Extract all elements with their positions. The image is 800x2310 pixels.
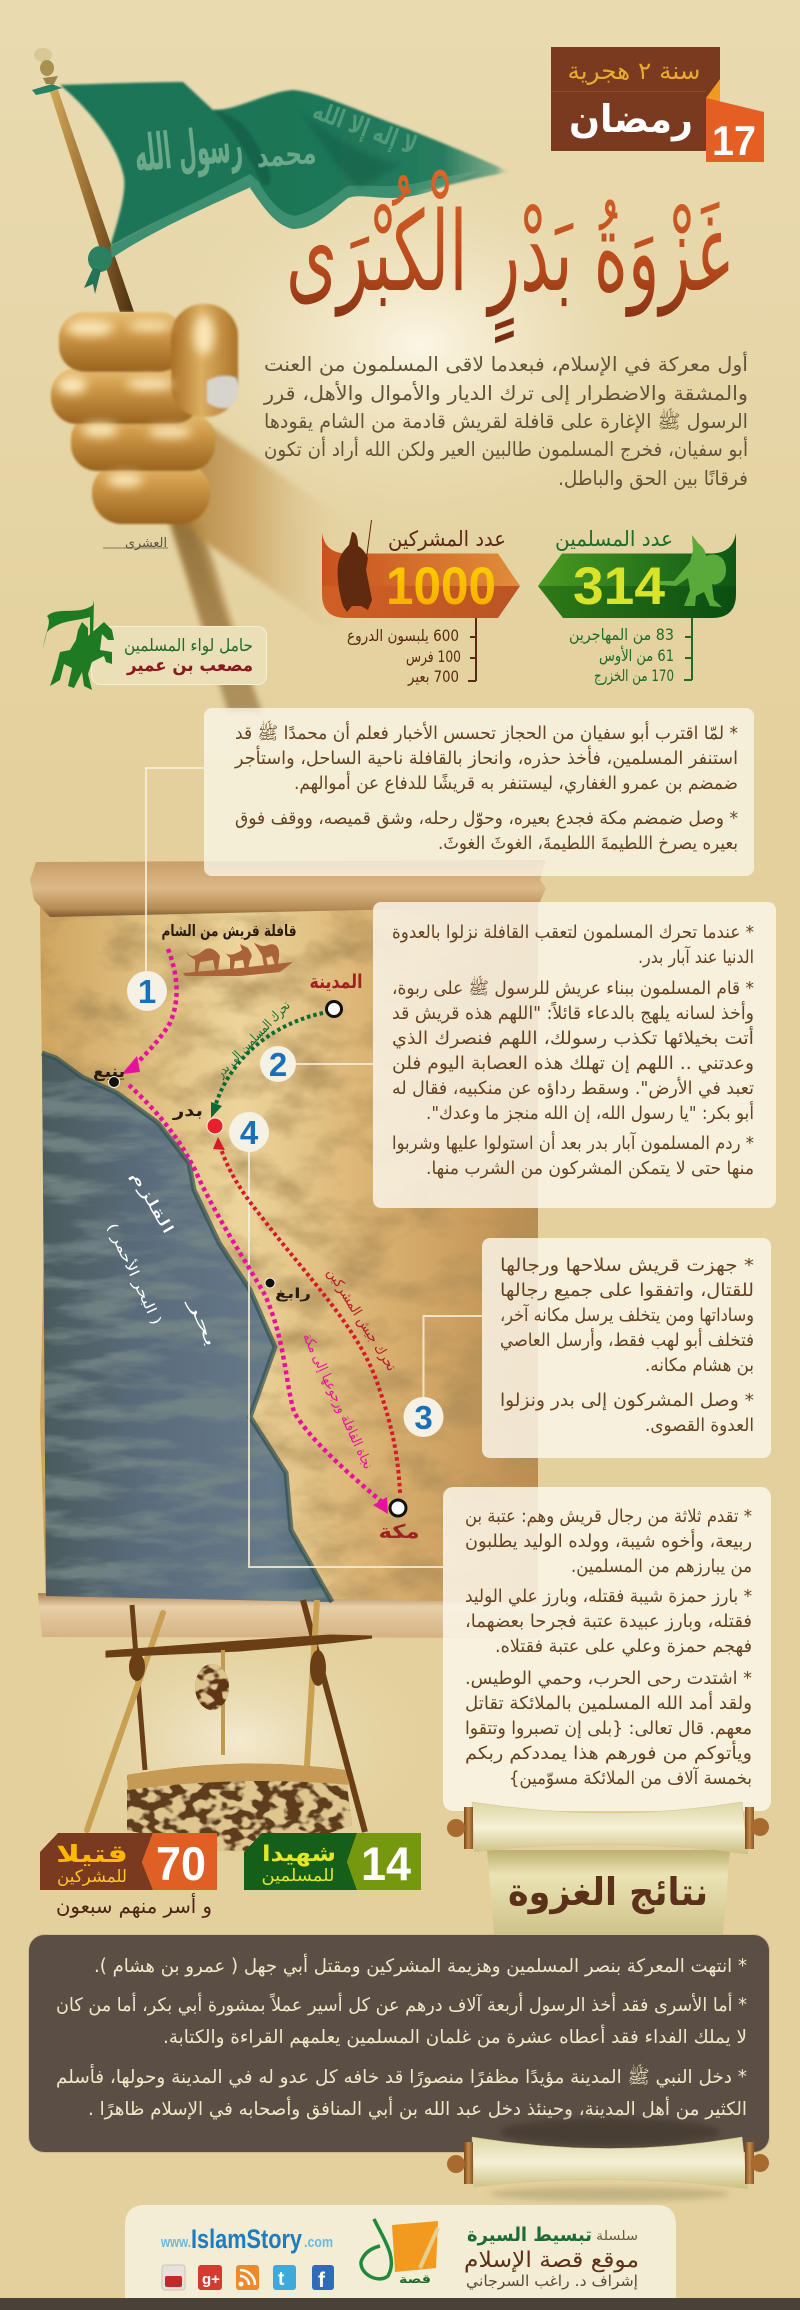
route: caravan escape to Makkah xyxy=(129,1085,388,1514)
result badge: Muslim martyrs: 14 xyxy=(361,1837,411,1890)
result badge: polytheists killed: 70 xyxy=(156,1837,206,1890)
panel: text box 3: * جهزت قريش سلاحها ورجالها xyxy=(500,1255,754,1276)
panel: text box 3: العدوة القصوى. xyxy=(645,1415,754,1436)
icon: youtube xyxy=(162,2265,185,2290)
logo: قصة xyxy=(399,2272,431,2286)
panel: text box 1: ضمضم بن عمرو الغفاري، ليستنفر به قريشًا للدفاع عن أموالهم. xyxy=(294,771,738,794)
panel: text box 3: فتخلف أبو لهب فقط، وأرسل العاصي xyxy=(500,1328,754,1351)
social icons xyxy=(162,2265,334,2292)
point: Rabigh xyxy=(265,1278,275,1288)
website address: www. xyxy=(160,2234,191,2251)
illustration: well xyxy=(87,1600,372,1851)
route label: army: تحرك جيش المشركين xyxy=(323,1266,400,1374)
route: Muslims to Badr xyxy=(211,1013,323,1118)
icon: twitter xyxy=(273,2265,296,2290)
route: polytheist army to Badr xyxy=(213,1137,400,1493)
lower pole over arm xyxy=(165,498,262,712)
route: Quraysh caravan to Yanbu xyxy=(122,949,177,1074)
flag pole xyxy=(34,48,262,712)
sea label: بحر xyxy=(184,1294,221,1350)
intro paragraph: الرسول ﷺ الإغارة على قافلة لقريش قادمة من الشام يقودها xyxy=(264,407,748,433)
panel: text box 4: ويأتوكم من فورهم هذا يمددكم ربكم xyxy=(465,1740,752,1764)
panel: text box 4: * اشتدت رحى الحرب، وحمي الوطيس. xyxy=(465,1668,752,1689)
panel: battle results: لا يملك الفداء فقد أعطاه عشرة من غلمان المسلمين يعلمهم القراءة والكتابة. xyxy=(163,2024,747,2048)
panel: battle results: * انتهت المعركة بنصر المسلمين وهزيمة المشركين ومقتل أبي جهل ( عمرو بن هشام ). xyxy=(94,1953,747,1977)
panel: footer xyxy=(125,2205,676,2298)
intro paragraph: أبو سفيان، فخرج المسلمون طالبين العير ولكن الله أراد أن تكون xyxy=(264,437,748,461)
icon: twitter: t xyxy=(278,2269,285,2290)
label: Badr: بدر xyxy=(172,1101,203,1120)
label: Yanbu: ينبع xyxy=(93,1062,125,1082)
heading: نتائج الغزوة xyxy=(508,1870,708,1915)
series name: سلسلة xyxy=(596,2229,638,2244)
panel: text box 1: * لمّا اقترب أبو سفيان من الحجاز تحسس الأخبار فعلم أن محمدًا ﷺ قد xyxy=(235,720,738,744)
point: Badr xyxy=(207,1118,223,1134)
logo xyxy=(361,2219,438,2286)
signature mark: العشرى xyxy=(125,536,167,551)
panel: text box 4: معهم. قال تعالى: {بلى إن تصبروا وتتقوا xyxy=(465,1718,752,1739)
point: Yanbu xyxy=(108,1076,120,1088)
breakdown list: 600 يلبسون الدروع xyxy=(347,626,459,646)
panel: text box 4: ولقد أمد الله المسلمين بالملائكة تقاتل xyxy=(465,1691,752,1714)
panel: text box 2: أبو بكر: "يا رسول الله، إن الله منجز ما وعدك". xyxy=(426,1101,754,1124)
panel: battle results: * دخل النبي ﷺ المدينة مؤيدًا مظفرًا منصورًا قد خافه كل عدو له في المدينة وحولها، فأسلم xyxy=(56,2063,747,2088)
icon: google plus: g+ xyxy=(202,2271,220,2288)
result badge: Muslim martyrs: شهيدا xyxy=(262,1842,336,1867)
breakdown list xyxy=(569,618,692,686)
panel: text box 4: فقتله، وبارز عبيدة عتبة فجرحا بعضهما، xyxy=(465,1611,752,1632)
result badge: Muslim martyrs: للمسلمين xyxy=(262,1866,334,1886)
year label: سنة ٢ هجرية xyxy=(568,57,700,85)
result badge: polytheists killed xyxy=(40,1833,217,1890)
intro paragraph: والمشقة والاضطرار إلى ترك الديار والأموال والأهل، قرر xyxy=(263,381,748,406)
panel: polytheists count: عدد المشركين xyxy=(388,527,506,551)
panel: text box 1: * وصل ضمضم مكة فجدع بعيره، وحوّل رحله، وشق قميصه، ووقف فوق xyxy=(235,808,738,829)
panel: text box 2: تعبد في الأرض". وسقط رداؤه عن منكبيه، فقال له xyxy=(392,1077,754,1099)
green flag with inscription: محمد xyxy=(255,135,317,175)
panel: text box 2: * ردم المسلمون آبار بدر بعد أن استولوا عليها وشربوا xyxy=(392,1131,754,1154)
top roll xyxy=(30,860,546,917)
marker 4 xyxy=(229,1112,269,1152)
marker 1: 1 xyxy=(138,973,156,1010)
panel: text box 2: * عندما تحرك المسلمون لتعقب القافلة نزلوا بالعدوة xyxy=(392,922,754,943)
breakdown list: 170 من الخزرج xyxy=(594,666,674,686)
connector: point 2 xyxy=(296,1063,373,1065)
day number: 17 xyxy=(712,117,756,164)
panel: Muslims count xyxy=(538,527,736,686)
panel: standard bearer xyxy=(43,600,266,690)
map scroll xyxy=(30,860,546,1638)
panel: text box 3: وساداتها ومن يتخلف يرسل مكانه آخر، xyxy=(500,1303,754,1326)
panel: text box 2 xyxy=(373,902,776,1208)
breakdown list: 100 فرس xyxy=(406,647,461,667)
panel: text box 1 xyxy=(204,708,754,876)
connector: point 1 xyxy=(146,768,204,972)
name line: مصعب بن عمير xyxy=(126,656,253,676)
icon: camels xyxy=(183,943,293,976)
icon: google plus xyxy=(198,2265,222,2290)
label: Rabigh: رابغ xyxy=(275,1286,311,1302)
marker 2 xyxy=(260,1046,296,1083)
connector: point 3 xyxy=(424,1316,482,1397)
marker 3 xyxy=(404,1397,444,1437)
panel: battle results: الكثير من أهل المدينة، وحينئذ دخل عبد الله بن أبي المنافق وأصحابه في الإسلام ظاهرًا . xyxy=(88,2096,747,2120)
sea label: ( البحر الأحمر ) xyxy=(103,1220,166,1328)
green flag with inscription: رسول الله xyxy=(131,115,245,184)
month label: رمضان xyxy=(569,97,693,141)
date badge xyxy=(551,47,764,164)
panel: text box 2: الدنيا عند آبار بدر. xyxy=(638,945,754,968)
point: Madinah xyxy=(326,1002,342,1016)
lower scroll xyxy=(447,2118,769,2201)
Red Sea xyxy=(42,1053,332,1602)
label: Madinah: المدينة xyxy=(310,971,362,993)
point: Makkah xyxy=(390,1500,406,1516)
illustration: hand holding the flag xyxy=(32,48,510,712)
panel: Muslims count: عدد المسلمين xyxy=(555,527,673,551)
result badge: polytheists killed: قتيلا xyxy=(56,1840,128,1868)
icon: facebook: f xyxy=(318,2269,326,2292)
intro paragraph: فرقانًا بين الحق والباطل. xyxy=(558,467,748,490)
panel: text box 3: بن هشام مكانه. xyxy=(645,1355,754,1376)
breakdown list xyxy=(347,618,476,687)
green flag with inscription: لا إله إلا الله xyxy=(309,96,421,161)
parchment land xyxy=(40,905,538,1603)
icon: rss xyxy=(236,2265,259,2290)
panel: text box 2: أتت بخيلائها تكذب رسولك، اللهم فنصرك الذي xyxy=(392,1026,754,1049)
signature mark xyxy=(103,536,168,551)
panel: text box 4: فهجم حمزة وعلي على عتبة فقتلاه. xyxy=(495,1636,752,1657)
forearm xyxy=(165,420,350,640)
website address: IslamStory xyxy=(191,2224,302,2254)
connector: point 4 xyxy=(249,1150,443,1567)
numbered markers xyxy=(127,971,444,1437)
results heading scroll xyxy=(447,1802,769,1934)
marker 4: 4 xyxy=(240,1114,259,1151)
supervisor: إشراف د. راغب السرجاني xyxy=(466,2272,638,2291)
bottom roll xyxy=(38,1593,540,1638)
panel: text box 3: للقتال، واتفقوا على جميع رجالها xyxy=(500,1280,754,1301)
panel: text box 4: بخمسة آلاف من الملائكة مسوّمين} xyxy=(509,1766,752,1789)
breakdown list: 61 من الأوس xyxy=(599,645,674,666)
marker 1 xyxy=(127,971,167,1011)
panel: text box 2: وعدتني .. اللهم إن تهلك هذه العصابة اليوم فلن xyxy=(392,1053,754,1074)
panel: battle results: * أما الأسرى فقد أخذ الرسول أربعة آلاف درهم عن كل أسير عملاً بمشورة أبي بكر، أما من كان xyxy=(56,1992,747,2016)
site name: موقع قصة الإسلام xyxy=(464,2248,639,2273)
number: 314 xyxy=(573,557,666,616)
number: 1000 xyxy=(386,557,496,616)
panel: text box 2: وأخذ لسانه يلهج بالدعاء قائلاً: "اللهم هذه قريش قد xyxy=(392,1001,754,1024)
result badge: Muslim martyrs xyxy=(244,1833,421,1890)
map labels and points xyxy=(93,922,420,1543)
captives note: و أسر منهم سبعون xyxy=(56,1893,212,1918)
panel: text box 4: من يبارزهم من المسلمين. xyxy=(571,1556,752,1577)
panel: battle results xyxy=(28,1934,770,2152)
fist xyxy=(51,304,238,524)
label: Makkah: مكة xyxy=(378,1521,420,1543)
map routes xyxy=(122,949,400,1514)
panel: text box 3: * وصل المشركون إلى بدر ونزلوا xyxy=(500,1390,754,1411)
breakdown list: 700 بعير xyxy=(407,667,459,687)
marker 2: 2 xyxy=(269,1046,287,1083)
panel: text box 1: استنفر المسلمين، فأخذ حذره، وانحاز بالقافلة ناحية الساحل، واستأجر xyxy=(234,745,738,769)
icon: Muslim warrior xyxy=(660,535,726,607)
panel: text box 4: ربيعة، وأخوه شيبة، وولده الوليد يطلبون xyxy=(465,1529,752,1552)
panel: text box 1: بعيره يصرخ اللطيمةَ اللطيمةَ، الغوثَ الغوثَ. xyxy=(438,833,738,854)
intro paragraph xyxy=(263,352,748,490)
panel: text box 4: * تقدم ثلاثة من رجال قريش وهم: عتبة بن xyxy=(465,1506,752,1527)
breakdown list: 83 من المهاجرين xyxy=(569,625,674,645)
green flag with inscription xyxy=(32,82,510,294)
label: caravan: قافلة قريش من الشام xyxy=(162,922,296,940)
series name: تبسيط السيرة xyxy=(467,2224,592,2246)
panel: text box 2: منها حتى لا يتمكن المشركون من الشرب منها. xyxy=(426,1158,754,1179)
route label: caravan: نجاة القافلة ورجوعها إلى مكة xyxy=(299,1331,376,1472)
result badge: polytheists killed: للمشركين xyxy=(57,1867,127,1887)
panel: text box 3 xyxy=(482,1238,771,1458)
icon: polytheist warrior xyxy=(338,520,372,612)
website address: .com xyxy=(304,2234,333,2251)
marker 3: 3 xyxy=(414,1399,433,1436)
intro paragraph: أول معركة في الإسلام، فبعدما لاقى المسلمون من العنت xyxy=(264,352,748,376)
panel: text box 2: * قام المسلمون ببناء عريش للرسول ﷺ على ربوة، xyxy=(392,975,754,999)
caption line: حامل لواء المسلمين xyxy=(124,636,253,656)
panel: text box 4: * بارز حمزة شيبة فقتله، وبارز علي الوليد xyxy=(465,1586,752,1607)
route label: Muslims: تحرك المسلمين إلى بدر xyxy=(213,998,294,1081)
panel: text box 4 xyxy=(443,1487,771,1811)
sea label: القلزم xyxy=(127,1168,178,1237)
footer bar xyxy=(0,2298,800,2310)
icon: facebook xyxy=(312,2265,334,2292)
icon: horse rider with flag xyxy=(43,600,114,690)
panel: polytheists count xyxy=(322,520,520,687)
